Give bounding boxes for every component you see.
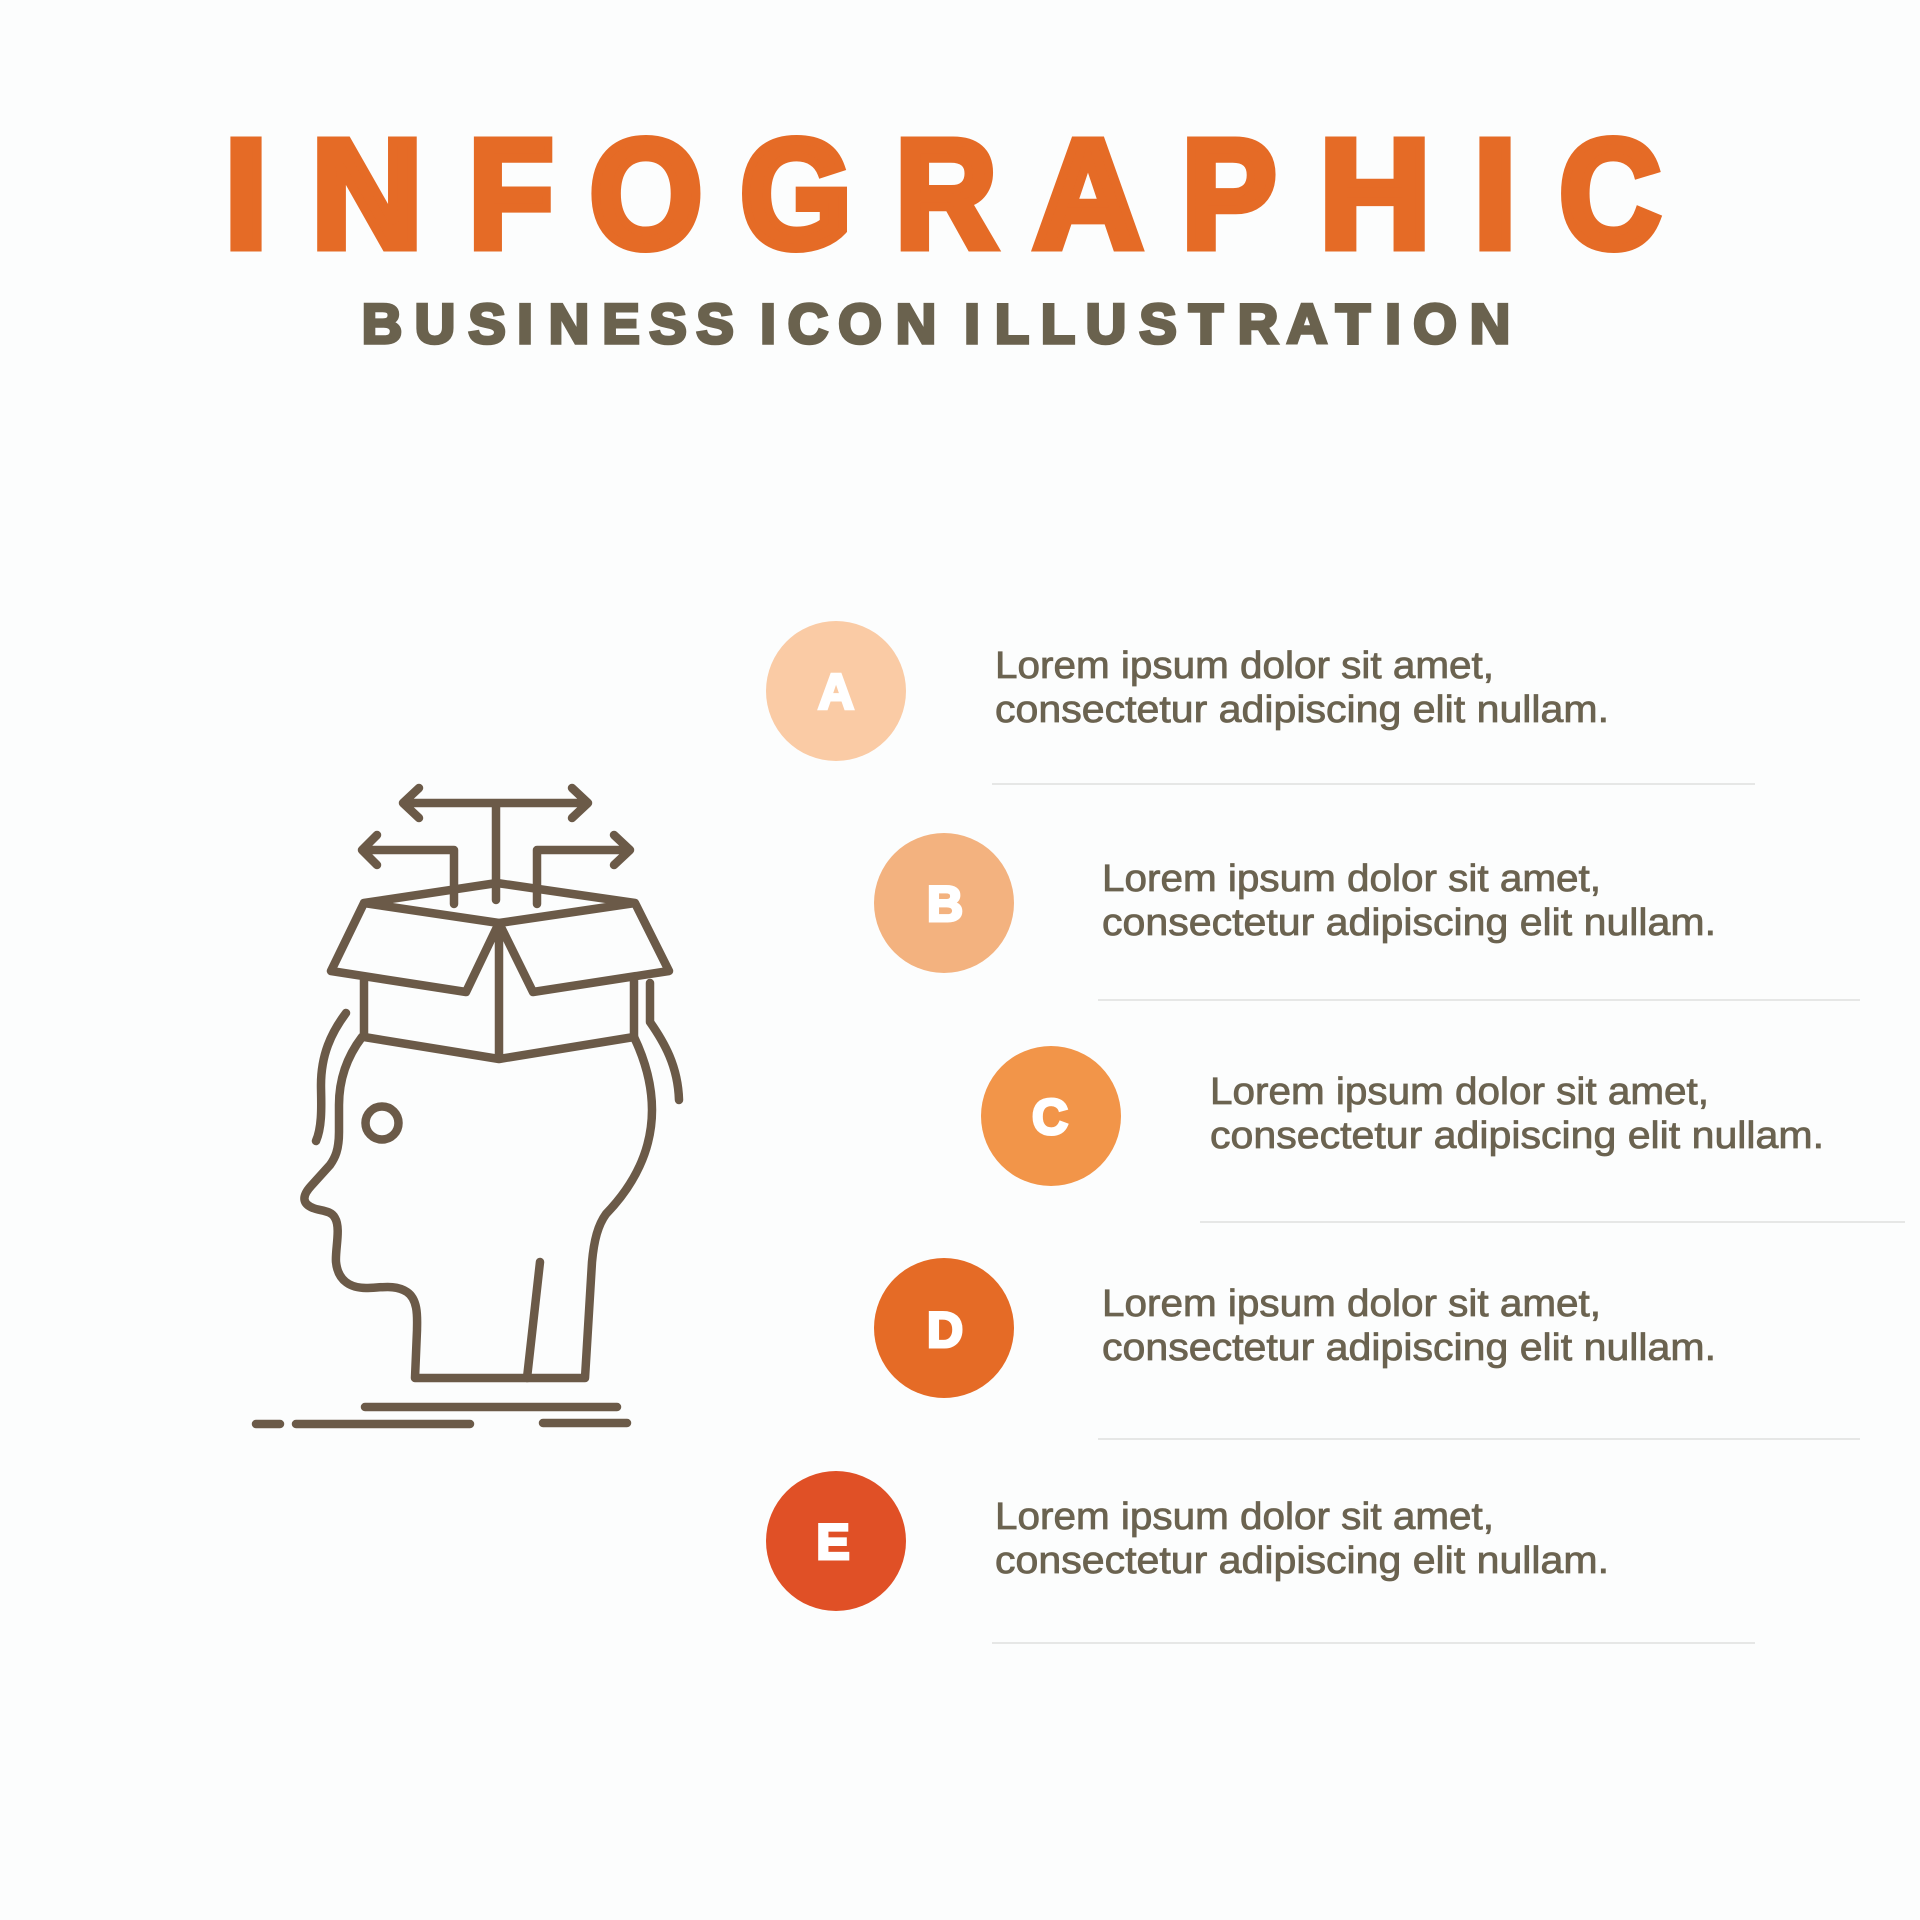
- icon: head with open box and arrows: [256, 788, 679, 1424]
- title: I: [225, 108, 267, 280]
- letter D: D: [927, 1302, 963, 1358]
- letter A: A: [818, 664, 854, 720]
- title: O: [590, 108, 702, 280]
- subtitle: BUSINESS ICON ILLUSTRATION: [362, 292, 1510, 355]
- title: [225, 107, 1661, 281]
- arrow: right: [537, 835, 630, 904]
- item A: [766, 621, 1609, 761]
- title: H: [1319, 108, 1431, 280]
- letter C: C: [1032, 1089, 1068, 1145]
- title: R: [895, 109, 997, 280]
- item C: [981, 1046, 1824, 1186]
- text A: Lorem ipsum dolor sit amet,: [995, 645, 1494, 687]
- item D: [874, 1258, 1716, 1398]
- title: A: [1034, 109, 1142, 280]
- circle B: [874, 833, 1014, 973]
- title: N: [311, 108, 423, 280]
- text C: Lorem ipsum dolor sit amet,: [1210, 1071, 1709, 1113]
- title: P: [1182, 109, 1276, 280]
- neck line: [527, 1262, 540, 1378]
- item B: [874, 833, 1716, 973]
- arrow: left: [362, 835, 454, 904]
- hair left: [316, 1013, 346, 1141]
- text C: consectetur adipiscing elit nullam.: [1210, 1115, 1824, 1157]
- text B: consectetur adipiscing elit nullam.: [1102, 902, 1716, 944]
- hair right: [650, 983, 679, 1100]
- text D: consectetur adipiscing elit nullam.: [1102, 1327, 1716, 1369]
- item E: [766, 1471, 1609, 1611]
- ground lines: [256, 1407, 627, 1424]
- title: I: [1474, 108, 1516, 280]
- text B: Lorem ipsum dolor sit amet,: [1102, 858, 1601, 900]
- arrow: top double-headed: [403, 788, 588, 900]
- title: C: [1559, 109, 1661, 280]
- open box: [331, 883, 669, 1059]
- circle E: [766, 1471, 906, 1611]
- letter E: E: [816, 1514, 850, 1570]
- text A: consectetur adipiscing elit nullam.: [995, 689, 1609, 731]
- text D: Lorem ipsum dolor sit amet,: [1102, 1283, 1601, 1325]
- text E: Lorem ipsum dolor sit amet,: [995, 1496, 1494, 1538]
- title: G: [740, 107, 852, 280]
- circle D: [874, 1258, 1014, 1398]
- circle A: [766, 621, 906, 761]
- title: F: [469, 108, 553, 281]
- text E: consectetur adipiscing elit nullam.: [995, 1540, 1609, 1582]
- eye: [366, 1106, 398, 1140]
- head outline: [304, 1037, 652, 1378]
- circle C: [981, 1046, 1121, 1186]
- letter B: B: [927, 876, 963, 932]
